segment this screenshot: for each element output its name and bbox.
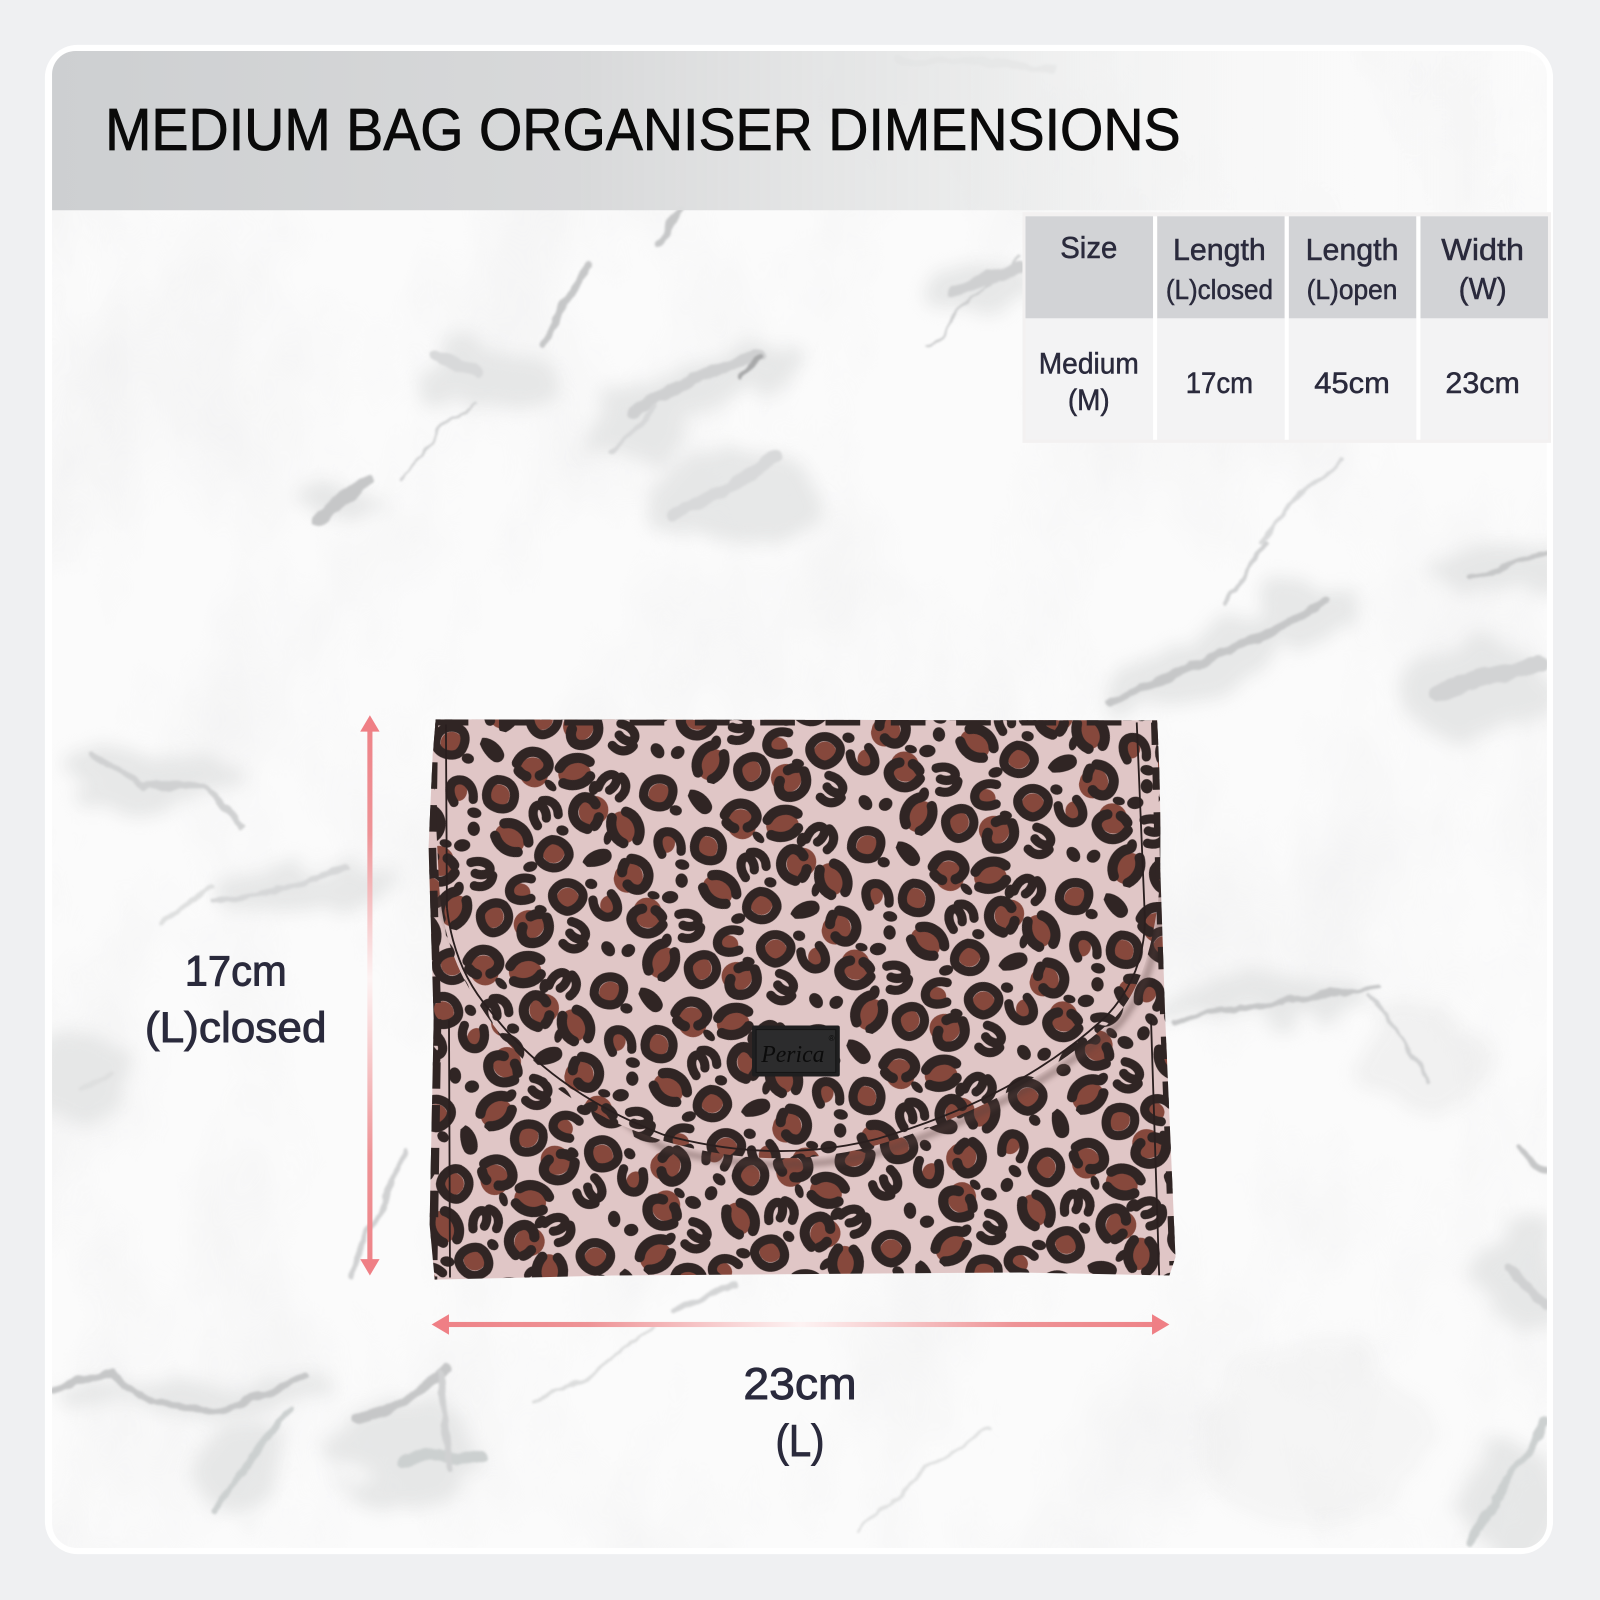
table background [1022, 212, 1551, 443]
body values: 45cm [1314, 367, 1390, 400]
panel: size table [1022, 212, 1551, 443]
header band [52, 51, 1547, 210]
bag body [429, 719, 1176, 1280]
brand patch: Perica [760, 1041, 824, 1068]
body values: 23cm [1445, 367, 1520, 400]
header row cells [1026, 216, 1548, 318]
header labels: Size [1060, 231, 1117, 265]
brand patch [752, 1026, 840, 1077]
marble clouds [41, 255, 1571, 1561]
body values [1039, 347, 1520, 417]
product: leopard print bag organiser [429, 719, 1176, 1280]
flap seam [447, 908, 1145, 1151]
header labels: (W) [1459, 272, 1507, 306]
header labels: Length [1173, 233, 1266, 267]
edge print [432, 719, 437, 1280]
column separators [1153, 216, 1420, 440]
bag flap [433, 719, 1160, 1158]
label: 23cm length: 23cm [743, 1358, 857, 1409]
label: 23cm length [743, 1358, 857, 1466]
header labels: Length [1306, 233, 1398, 267]
label: 23cm length: (L) [776, 1415, 824, 1466]
label: 17cm closed length: (L)closed [145, 1004, 327, 1052]
body values: (M) [1068, 384, 1110, 417]
title: MEDIUM BAG ORGANISER DIMENSIONS [105, 96, 1181, 163]
body row cells [1026, 318, 1548, 440]
arrow: vertical length [360, 715, 380, 1276]
flap shadow [439, 888, 1163, 1165]
label: 17cm closed length: 17cm [185, 948, 287, 996]
body values: 17cm [1186, 367, 1253, 400]
arrow: horizontal width [432, 1314, 1169, 1335]
header labels: Width [1441, 233, 1524, 267]
body values: Medium [1039, 347, 1139, 380]
label: 17cm closed length [145, 948, 327, 1052]
header labels [1060, 231, 1524, 306]
header labels: (L)open [1307, 274, 1397, 305]
side seams [446, 722, 1159, 1278]
brand patch: ® [829, 1034, 835, 1043]
header labels: (L)closed [1166, 274, 1273, 305]
